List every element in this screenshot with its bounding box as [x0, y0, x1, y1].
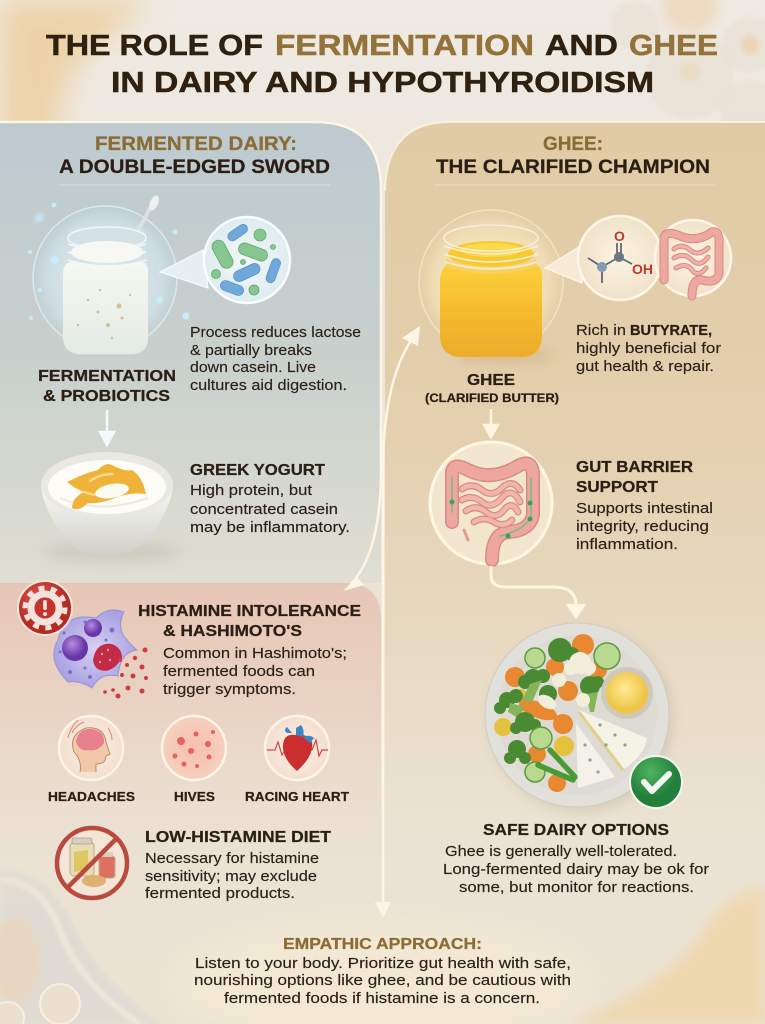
text: gut barrier support: inflammation. — [576, 537, 678, 553]
heading: ghee — [436, 134, 710, 178]
label: ghee clarified butter — [425, 372, 559, 405]
icon: ghee jar — [419, 210, 563, 363]
title — [46, 30, 718, 99]
text: gut barrier support — [576, 459, 713, 553]
icon: headaches — [59, 716, 123, 780]
icon: butyrate molecule: OH — [632, 261, 653, 277]
title: AND — [545, 30, 618, 62]
text: fermentation description: Process reduces lactose — [190, 325, 361, 341]
text: low-histamine diet: LOW-HISTAMINE DIET — [145, 829, 332, 846]
panel outlines and flow arrows — [0, 122, 765, 908]
text: safe dairy options: Long-fermented dairy may be ok for — [443, 862, 709, 878]
icon: butyrate molecule: O — [614, 228, 625, 244]
icon: gut barrier circle — [430, 442, 552, 564]
label: fermentation and probiotics: FERMENTATION — [38, 368, 176, 385]
arrow: jar to yogurt — [100, 410, 114, 445]
icon: hives — [162, 716, 226, 780]
label: ghee clarified butter: GHEE — [467, 372, 515, 389]
heading: fermented dairy — [59, 134, 330, 178]
arrow: to ghee — [402, 326, 420, 346]
icon: intestine bubble — [655, 220, 731, 296]
icon: plate of safe dairy — [485, 623, 673, 812]
title: IN DAIRY AND HYPOTHYROIDISM — [111, 67, 654, 99]
title: FERMENTATION — [275, 30, 534, 62]
text: gut barrier support: SUPPORT — [576, 479, 659, 496]
icon: histamine warning and mast cell — [18, 581, 148, 698]
text: fermentation description: cultures aid digestion. — [190, 378, 347, 394]
text: low-histamine diet: fermented products. — [145, 886, 295, 902]
text: empathic approach: fermented foods if histamine is a concern. — [224, 991, 540, 1007]
text: histamine intolerance: & HASHIMOTO'S — [163, 623, 302, 640]
text: empathic approach: EMPATHIC APPROACH: — [283, 936, 482, 953]
arrow: to empathic approach — [375, 902, 391, 918]
panel: fermented dairy — [0, 122, 381, 583]
label: fermentation and probiotics: & PROBIOTICS — [43, 388, 170, 405]
heading: fermented dairy: A DOUBLE-EDGED SWORD — [59, 157, 330, 178]
text: low-histamine diet — [145, 829, 332, 902]
arrow: ghee to gut — [484, 409, 498, 437]
label: fermentation and probiotics — [38, 368, 176, 405]
icon: butyrate molecule — [545, 216, 662, 300]
text: butyrate description: highly beneficial for — [576, 341, 721, 357]
text: empathic approach — [194, 936, 571, 1007]
text: fermentation description — [190, 325, 361, 394]
text: safe dairy options: Ghee is generally well-tolerated. — [445, 844, 677, 860]
text: empathic approach: nourishing options like ghee, and be cautious with — [194, 973, 571, 989]
text: butyrate description: gut health & repair. — [576, 359, 714, 375]
text: greek yogurt: concentrated casein — [190, 502, 338, 518]
text: safe dairy options: some, but monitor for reactions. — [459, 880, 694, 896]
icon: racing heart — [265, 716, 329, 780]
heading: ghee: GHEE: — [543, 134, 603, 155]
label: ghee clarified butter: (CLARIFIED BUTTER) — [425, 391, 559, 405]
text: histamine intolerance: fermented foods can — [163, 664, 315, 680]
label: hives: HIVES — [174, 789, 215, 804]
text: greek yogurt: High protein, but — [190, 483, 312, 499]
text: greek yogurt: may be inflammatory. — [190, 520, 350, 536]
text: fermentation description: & partially breaks — [190, 343, 312, 359]
text: histamine intolerance: HISTAMINE INTOLERANCE — [138, 603, 361, 620]
heading: fermented dairy: FERMENTED DAIRY: — [95, 134, 297, 155]
text: gut barrier support: GUT BARRIER — [576, 459, 693, 476]
title: GHEE — [629, 30, 718, 62]
text: greek yogurt — [190, 462, 350, 536]
arrow: to histamine — [343, 577, 364, 591]
text: histamine intolerance — [138, 603, 361, 698]
title: THE ROLE OF — [46, 30, 263, 62]
text: histamine intolerance: Common in Hashimoto's; — [163, 646, 347, 662]
text: greek yogurt: GREEK YOGURT — [190, 462, 326, 479]
icon: probiotic bubble — [160, 217, 290, 303]
panel: histamine — [0, 583, 381, 915]
text: gut barrier support: integrity, reducing — [576, 519, 709, 535]
text: low-histamine diet: Necessary for histamine — [145, 851, 319, 867]
text: safe dairy options — [443, 822, 709, 896]
text: gut barrier support: Supports intestinal — [576, 501, 713, 517]
label: headaches: HEADACHES — [48, 789, 135, 804]
text: safe dairy options: SAFE DAIRY OPTIONS — [483, 822, 669, 839]
text: butyrate description — [576, 323, 721, 375]
icon: green check — [630, 756, 682, 808]
text: butyrate description: Rich in — [576, 323, 626, 339]
icon: fermentation jar — [28, 194, 190, 355]
heading: ghee: THE CLARIFIED CHAMPION — [436, 157, 710, 178]
text: low-histamine diet: sensitivity; may exclude — [145, 869, 317, 885]
panel: ghee — [385, 122, 765, 915]
text: empathic approach: Listen to your body. Prioritize gut health with safe, — [195, 956, 571, 972]
text: histamine intolerance: trigger symptoms. — [163, 682, 296, 698]
icon: no fermented foods — [55, 826, 129, 900]
text: butyrate description: BUTYRATE, — [630, 323, 712, 339]
arrow: gut to safe dairy — [491, 566, 586, 619]
label: racing heart: RACING HEART — [245, 789, 349, 804]
icon: greek yogurt bowl — [41, 452, 182, 562]
text: fermentation description: down casein. Live — [190, 360, 316, 376]
